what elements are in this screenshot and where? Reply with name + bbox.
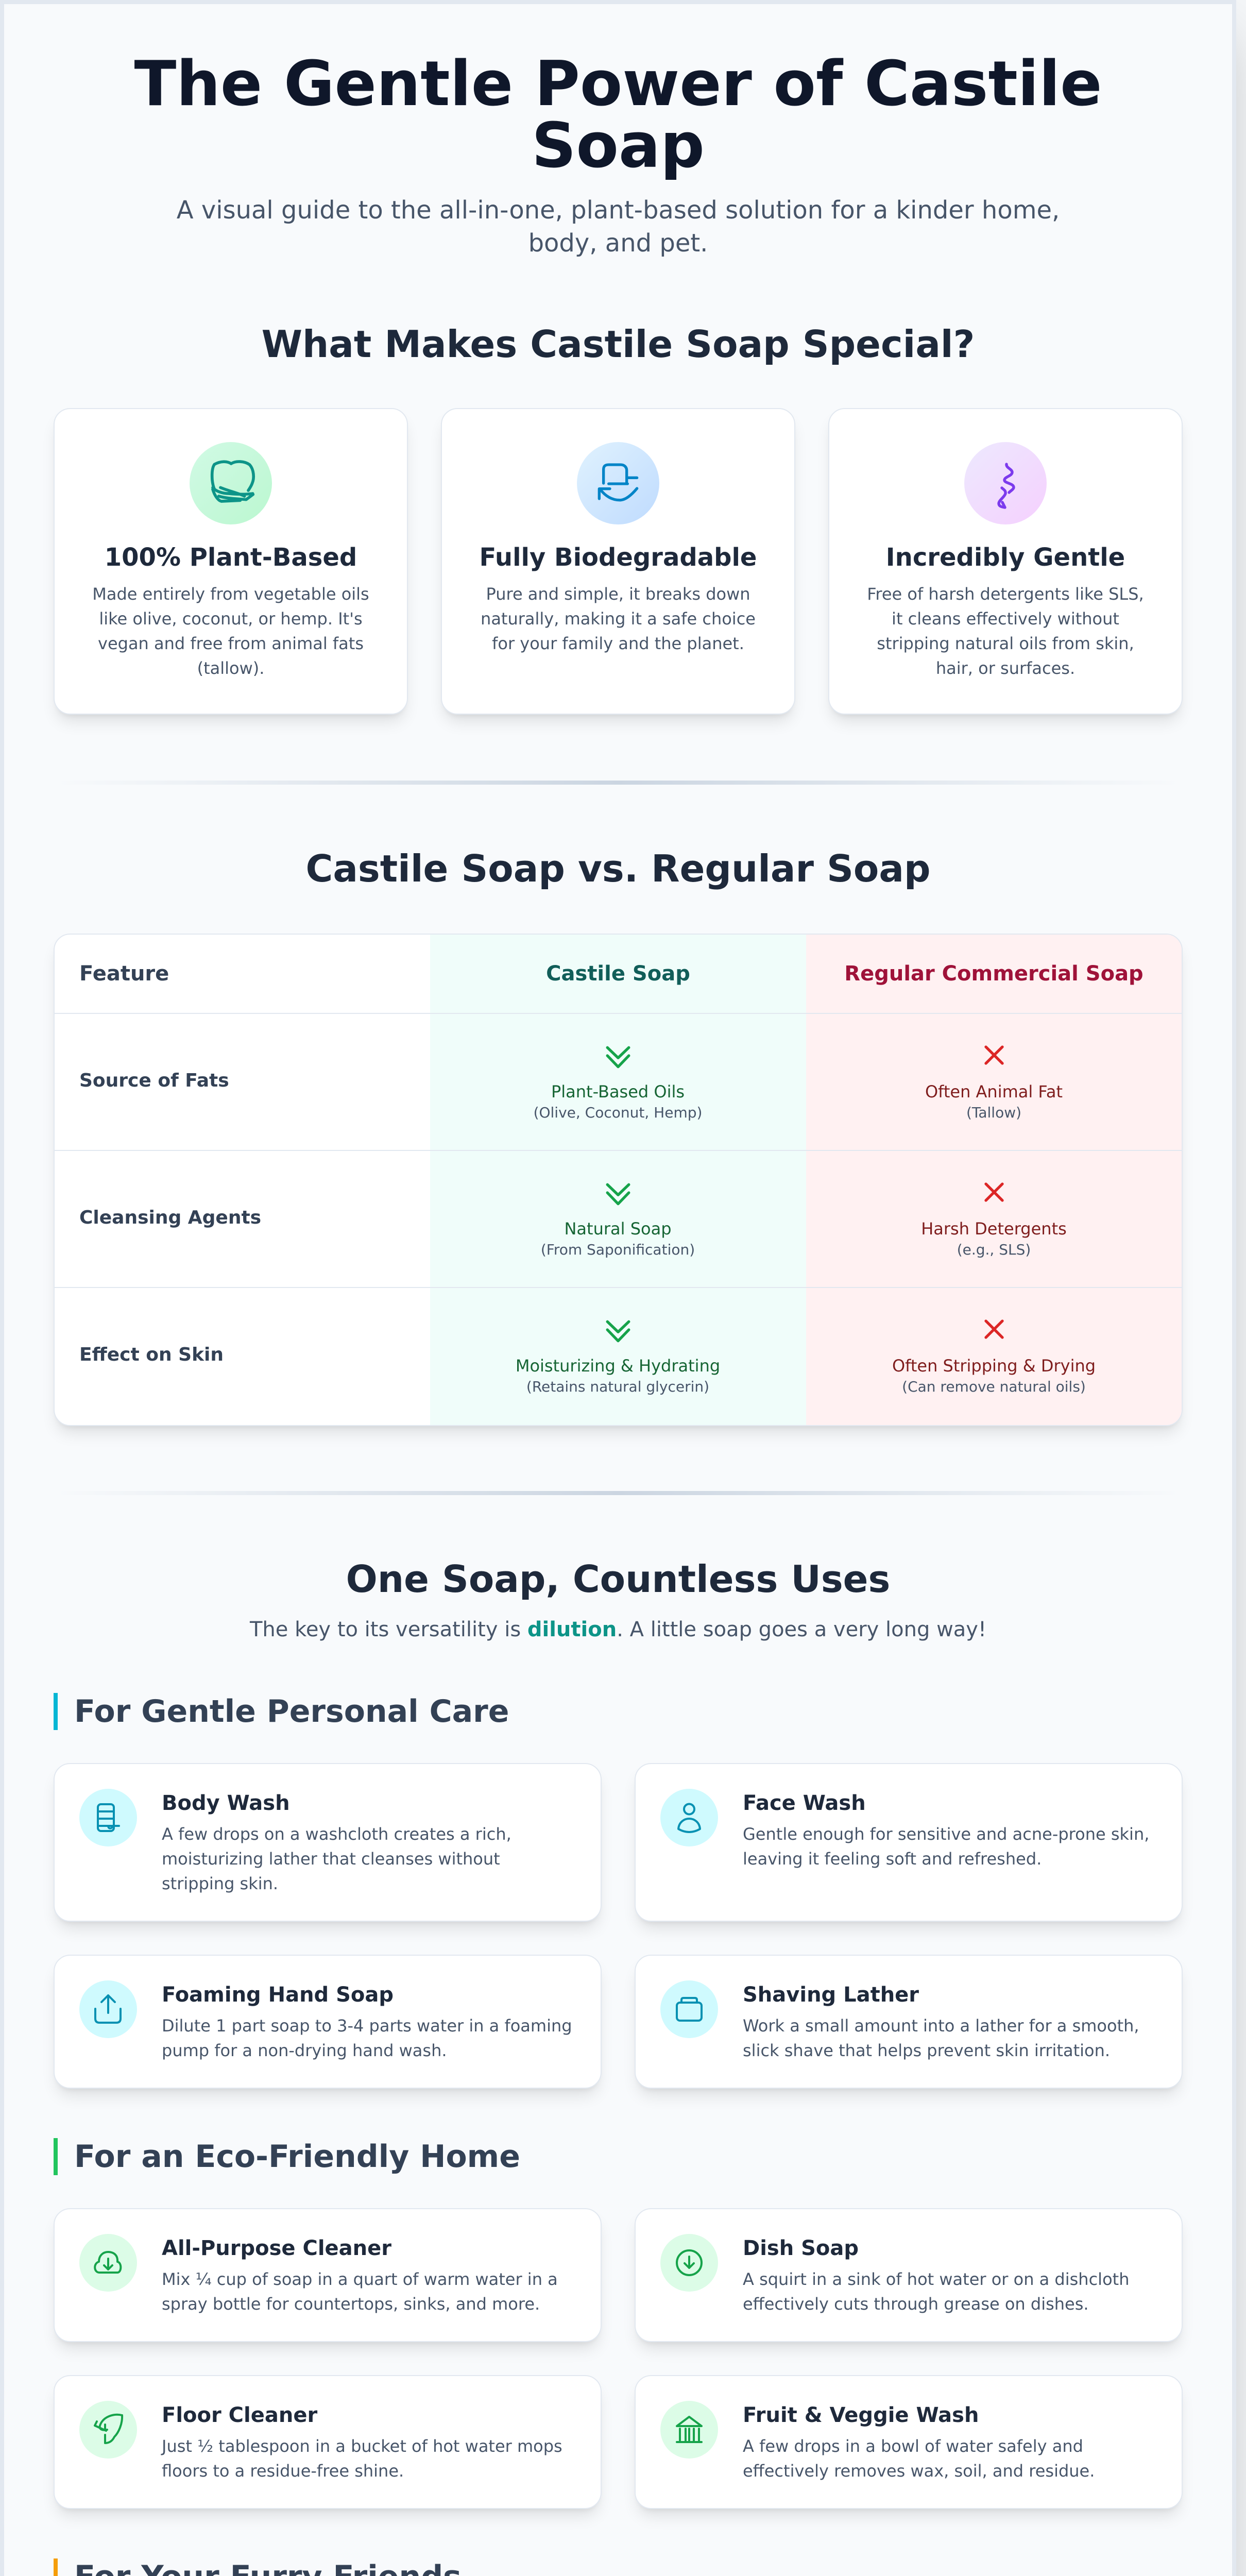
card text: for your family and the planet. — [492, 634, 744, 653]
use text — [162, 1824, 511, 1893]
use text: Just ½ tablespoon in a bucket of hot water mops — [162, 2436, 562, 2456]
card text: naturally, making it a safe choice — [481, 609, 756, 629]
use text — [162, 2269, 558, 2314]
use text: stripping skin. — [162, 1874, 278, 1893]
card heading: Incredibly Gentle — [886, 543, 1125, 572]
use title: Fruit & Veggie Wash — [743, 2403, 979, 2427]
panel: foaming hand soap — [54, 1955, 602, 2089]
card text — [867, 584, 1144, 678]
subtitle: A visual guide to the all-in-one, plant-based solution for a kinder home, — [177, 196, 1060, 225]
panel: body wash — [54, 1763, 602, 1922]
use title: Dish Soap — [743, 2236, 859, 2260]
use text: spray bottle for countertops, sinks, and more. — [162, 2294, 540, 2314]
heading: one soap, countless uses: One Soap, Countless Uses — [346, 1557, 890, 1601]
regular cell: often animal fat: Often Animal Fat — [925, 1082, 1063, 1101]
subheading: eco-friendly home — [54, 2138, 1183, 2175]
heading: what makes castile soap special: What Makes Castile Soap Special? — [262, 323, 975, 366]
use title: Face Wash — [743, 1791, 866, 1815]
use title: Body Wash — [162, 1791, 290, 1815]
use title: Shaving Lather — [743, 1983, 919, 2007]
regular cell: often stripping and drying: Often Stripping & Drying — [892, 1356, 1096, 1376]
row label: cleansing agents: Cleansing Agents — [79, 1207, 261, 1228]
icon: plant leaf — [190, 442, 272, 524]
castile cell: moisturizing and hydrating — [516, 1320, 720, 1395]
use text: pump for a non-drying hand wash. — [162, 2041, 447, 2060]
use text — [743, 2269, 1129, 2314]
castile cell: moisturizing and hydrating: (Retains natural glycerin) — [526, 1378, 709, 1395]
panel: face wash — [635, 1763, 1183, 1922]
card text: hair, or surfaces. — [936, 658, 1075, 678]
use text: A squirt in a sink of hot water or on a dishcloth — [743, 2269, 1129, 2289]
title: The Gentle Power of Castile — [134, 48, 1102, 120]
regular cell: often animal fat — [925, 1045, 1063, 1121]
lead text about dilution: The key to its versatility is dilution. A little soap goes a very long way! — [250, 1618, 986, 1641]
panel: 100% plant-based — [54, 408, 408, 715]
use title: Floor Cleaner — [162, 2403, 317, 2427]
panel: dish soap — [635, 2208, 1183, 2342]
icon: jar — [660, 1980, 718, 2038]
comparison table — [54, 934, 1183, 1426]
row label: effect on skin: Effect on Skin — [79, 1344, 224, 1365]
use text: floors to a residue-free shine. — [162, 2461, 404, 2481]
regular cell: harsh detergents: Harsh Detergents — [921, 1219, 1067, 1239]
column header: castile soap: Castile Soap — [546, 962, 690, 986]
castile cell: natural soap: Natural Soap — [564, 1219, 672, 1239]
card text: (tallow). — [197, 658, 264, 678]
card text: like olive, coconut, or hemp. It's — [99, 609, 363, 629]
castile cell: plant-based oils: Plant-Based Oils — [551, 1082, 685, 1101]
subheading: eco-friendly home: For an Eco-Friendly Home — [74, 2139, 520, 2175]
use title: Foaming Hand Soap — [162, 1983, 394, 2007]
card heading: Fully Biodegradable — [480, 543, 757, 572]
panel: incredibly gentle — [828, 408, 1183, 715]
panel: shaving lather — [635, 1955, 1183, 2089]
icon: leaf — [79, 2401, 137, 2459]
castile cell: natural soap — [541, 1183, 695, 1258]
icon: upload tray — [79, 1980, 137, 2038]
regular cell: often stripping and drying: (Can remove natural oils) — [902, 1378, 1086, 1395]
panel: all-purpose cleaner — [54, 2208, 602, 2342]
use text — [743, 1824, 1149, 1869]
column header: regular commercial soap: Regular Commercial Soap — [844, 962, 1143, 986]
use title: All-Purpose Cleaner — [162, 2236, 391, 2260]
subheading: furry friends — [54, 2558, 1183, 2576]
card text: Pure and simple, it breaks down — [486, 584, 750, 604]
icon: bottle — [79, 1789, 137, 1846]
column header: feature: Feature — [79, 962, 169, 986]
icon: recycle arrow — [577, 442, 659, 524]
heading: castile soap vs regular soap: Castile Soap vs. Regular Soap — [305, 847, 931, 890]
card text: Free of harsh detergents like SLS, — [867, 584, 1144, 604]
use text: Work a small amount into a lather for a smooth, — [743, 2016, 1139, 2036]
use text: Gentle enough for sensitive and acne-prone skin, — [743, 1824, 1149, 1844]
use text: effectively cuts through grease on dishes. — [743, 2294, 1089, 2314]
icon: bank building — [660, 2401, 718, 2459]
use text: Mix ¼ cup of soap in a quart of warm water in a — [162, 2269, 558, 2289]
icon: squiggle — [964, 442, 1047, 524]
card text — [92, 584, 369, 678]
regular cell: often animal fat: (Tallow) — [966, 1104, 1021, 1121]
panel: floor cleaner — [54, 2375, 602, 2509]
castile cell: natural soap: (From Saponification) — [541, 1241, 695, 1258]
use text: slick shave that helps prevent skin irritation. — [743, 2041, 1110, 2060]
use text: leaving it feeling soft and refreshed. — [743, 1849, 1042, 1869]
use text — [743, 2016, 1139, 2060]
subtitle — [177, 196, 1060, 258]
icon: person — [660, 1789, 718, 1846]
use text — [161, 2436, 562, 2481]
castile cell: plant-based oils: (Olive, Coconut, Hemp) — [534, 1104, 702, 1121]
use text: A few drops on a washcloth creates a rich, — [162, 1824, 511, 1844]
regular cell: harsh detergents: (e.g., SLS) — [957, 1241, 1031, 1258]
panel: fully biodegradable — [441, 408, 795, 715]
castile cell: plant-based oils — [534, 1046, 702, 1121]
regular cell: harsh detergents — [921, 1182, 1067, 1258]
icon: cloud download — [79, 2234, 137, 2292]
card heading: 100% Plant-Based — [105, 543, 357, 572]
use text: effectively removes wax, soil, and residue. — [743, 2461, 1095, 2481]
card text: it cleans effectively without — [892, 609, 1119, 629]
title — [134, 48, 1102, 182]
use text: Dilute 1 part soap to 3-4 parts water in a foaming — [162, 2016, 572, 2036]
card text — [481, 584, 756, 653]
title: Soap — [532, 110, 705, 182]
subheading: personal care — [54, 1693, 1183, 1730]
use text: A few drops in a bowl of water safely and — [743, 2436, 1083, 2456]
card text: vegan and free from animal fats — [98, 634, 364, 653]
icon: circled arrow — [660, 2234, 718, 2292]
subtitle: body, and pet. — [528, 229, 708, 258]
card text: Made entirely from vegetable oils — [92, 584, 369, 604]
subheading: personal care: For Gentle Personal Care — [74, 1693, 509, 1730]
use text — [743, 2436, 1095, 2481]
use text: moisturizing lather that cleanses without — [162, 1849, 500, 1869]
use text — [162, 2016, 572, 2060]
regular cell: often stripping and drying — [892, 1319, 1096, 1395]
castile cell: moisturizing and hydrating: Moisturizing & Hydrating — [516, 1356, 720, 1376]
panel: fruit and veggie wash — [635, 2375, 1183, 2509]
row label: source of fats: Source of Fats — [79, 1070, 229, 1091]
card text: stripping natural oils from skin, — [877, 634, 1134, 653]
